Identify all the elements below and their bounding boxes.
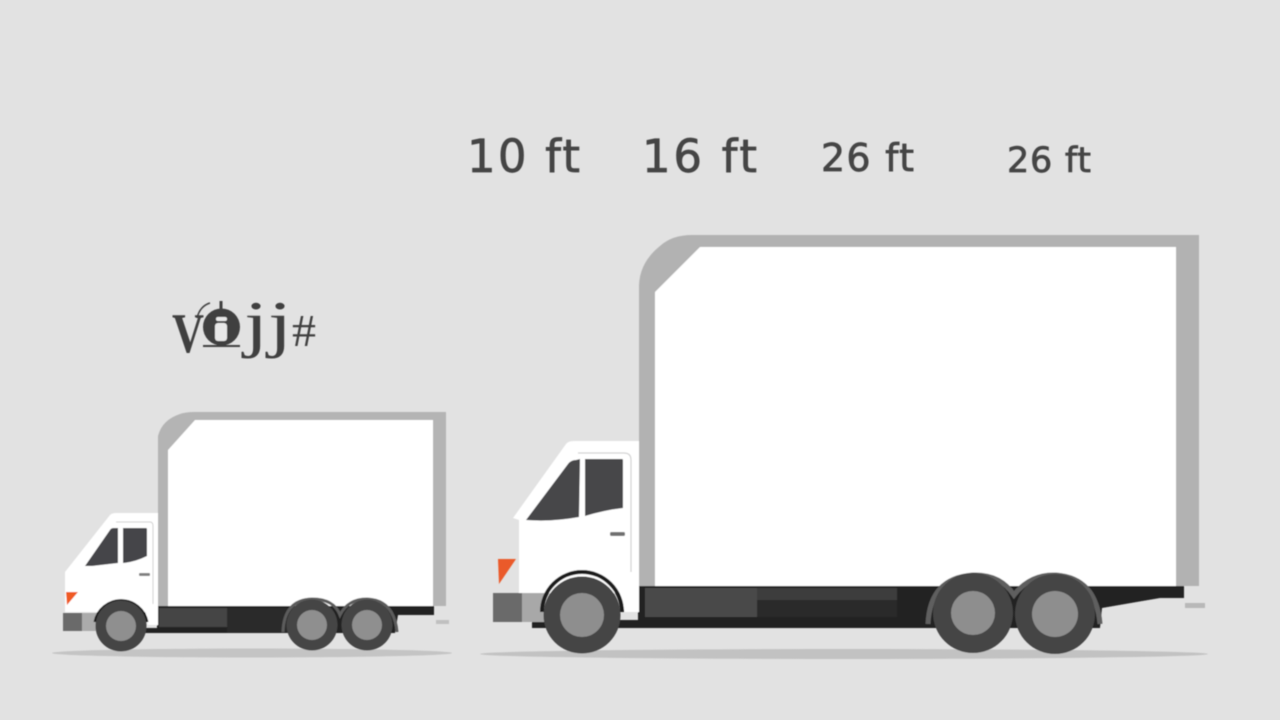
headlight	[498, 559, 516, 584]
label: 16 ft: 16 ft	[642, 130, 757, 183]
rear wheels small	[283, 599, 397, 650]
front wheel small	[95, 600, 147, 652]
cab small	[65, 513, 158, 625]
side window	[585, 459, 623, 516]
windshield	[85, 528, 118, 566]
garbled label above small truck: V	[172, 303, 204, 365]
garbled label above small truck	[172, 288, 316, 365]
door handle	[610, 532, 625, 536]
garbled label above small truck: jj	[241, 288, 292, 359]
ground shadow small	[52, 648, 452, 658]
icon: apple-shaped glyph	[203, 301, 240, 347]
cargo box large	[639, 235, 1199, 588]
label: 26 ft right: 26 ft	[1007, 141, 1091, 181]
small truck	[52, 412, 452, 658]
bumper large	[493, 593, 545, 622]
windshield	[526, 459, 580, 521]
rear marker large	[1185, 603, 1205, 608]
large truck	[480, 235, 1208, 659]
garbled label above small truck: #	[292, 305, 316, 356]
label: 10 ft: 10 ft	[467, 130, 580, 183]
chassis large	[532, 586, 1184, 628]
cargo box small	[158, 412, 446, 606]
size labels	[467, 130, 1091, 183]
chassis small	[145, 606, 434, 633]
ground shadow large	[480, 649, 1208, 659]
rear marker small	[436, 620, 449, 624]
cab large	[498, 441, 639, 612]
label: 26 ft middle: 26 ft	[821, 136, 914, 180]
side window	[123, 528, 147, 563]
front wheel large	[542, 572, 622, 654]
door handle	[139, 573, 150, 576]
headlight	[66, 592, 78, 605]
bumper small	[63, 613, 98, 631]
rear wheels large	[928, 573, 1100, 654]
